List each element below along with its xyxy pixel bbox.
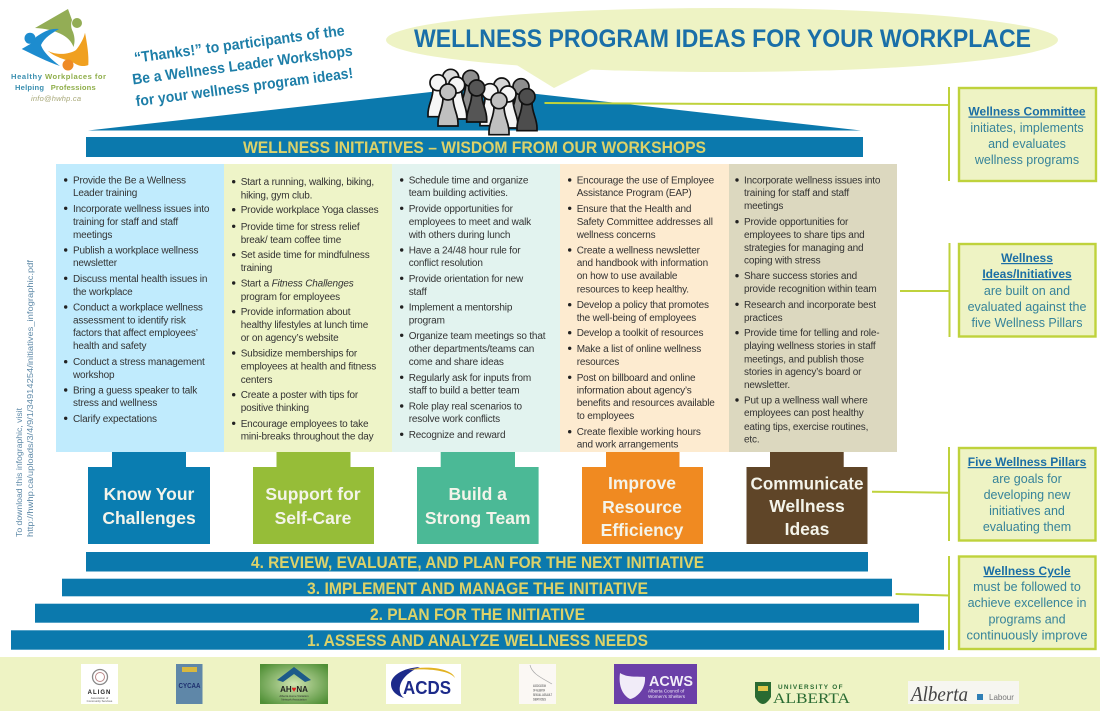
panel: Support for Self-Care initiatives: training <box>241 263 272 274</box>
panel: Build a Strong Team initiatives: Provide opportunities for <box>409 204 514 215</box>
panel: Communicate Wellness Ideas initiatives: employees to share tips and <box>744 230 864 241</box>
panel: Support for Self-Care initiatives: Start a Fitness Challenges <box>241 278 354 290</box>
panel: Support for Self-Care initiatives: mini-breaks throughout the day <box>241 432 374 442</box>
logo: Alberta Labour <box>908 681 1019 706</box>
callout: Wellness Committee: Wellness Committee <box>968 104 1086 118</box>
callout: Wellness Committee: and evaluates <box>988 137 1066 151</box>
logo: Alberta Labour: Labour <box>989 693 1014 702</box>
callout: Wellness Committee: initiates, implements <box>970 121 1084 135</box>
download note: To download this infographic, visit <box>14 407 24 537</box>
cycle step 4 <box>86 552 868 572</box>
panel: Improve Resource Efficiency initiatives: Post on billboard and online <box>577 373 696 384</box>
panel: Communicate Wellness Ideas initiatives: Provide time for telling and role- <box>744 328 879 339</box>
panel: Know Your Challenges initiatives: the workplace <box>73 287 133 298</box>
callout: Wellness Ideas/Initiatives: Wellness <box>1001 251 1053 265</box>
logo: AHNA: AH♥NA <box>280 685 308 694</box>
cycle step 2: 2. PLAN FOR THE INITIATIVE <box>370 606 585 624</box>
pillar: Improve Resource Efficiency: Improve <box>608 473 676 493</box>
panel: Communicate Wellness Ideas initiatives: Put up a wellness wall where <box>744 396 868 406</box>
callout: Wellness Cycle: achieve excellence in <box>968 596 1086 610</box>
callout: Wellness Ideas/Initiatives: are built on and <box>984 284 1070 298</box>
roof triangle <box>88 87 861 130</box>
pillar: Support for Self-Care: Support for <box>265 484 361 504</box>
cycle step 3: 3. IMPLEMENT AND MANAGE THE INITIATIVE <box>307 580 648 598</box>
panel: Communicate Wellness Ideas initiatives: newsletter. <box>744 380 790 391</box>
callout: Five Wellness Pillars <box>959 448 1096 540</box>
panel: Support for Self-Care initiatives: hiking, gym club. <box>241 190 312 202</box>
logo: Healthy Workplaces for Helping Professions: Helping <box>15 83 44 92</box>
pillar: Communicate Wellness Ideas: Ideas <box>785 519 830 539</box>
panel: Support for Self-Care initiatives: or on agency’s website <box>241 333 339 344</box>
panel: Improve Resource Efficiency initiatives: Assistance Program (EAP) <box>577 188 692 199</box>
cycle step 3 <box>62 579 892 598</box>
panel: Build a Strong Team initiatives: staff to build a better team <box>409 386 519 396</box>
panel: Build a Strong Team initiatives: staff <box>409 287 427 298</box>
panel: Build a Strong Team initiatives: program <box>409 316 445 326</box>
logo: ACWS: Alberta Council of <box>648 688 685 694</box>
panel: Communicate Wellness Ideas initiatives: Incorporate wellness issues into <box>744 176 881 186</box>
panel: Know Your Challenges initiatives: Conduct a workplace wellness <box>73 302 203 314</box>
logo: AHNA <box>260 664 328 704</box>
panel: Communicate Wellness Ideas initiatives: strategies for managing and <box>744 243 863 254</box>
connector: committee <box>544 87 949 181</box>
callout: Wellness Committee: wellness programs <box>974 153 1079 167</box>
thank-you note <box>131 22 354 110</box>
logo: Healthy Workplaces for Helping Professions <box>11 9 106 103</box>
panel: Know Your Challenges initiatives: Leader training <box>73 188 137 199</box>
panel: Communicate Wellness Ideas initiatives: Research and incorporate best <box>744 300 876 311</box>
panel: Improve Resource Efficiency initiatives: the well-being of employees <box>577 313 696 324</box>
panel: Support for Self-Care initiatives: Subsidize memberships for <box>241 348 358 360</box>
panel: Communicate Wellness Ideas initiatives <box>729 164 897 452</box>
panel: Communicate Wellness Ideas initiatives: meetings, and publish those <box>744 354 865 366</box>
panel: Build a Strong Team initiatives: Have a 24/48 hour rule for <box>409 246 521 256</box>
panel: Communicate Wellness Ideas initiatives: training for staff and staff <box>744 188 849 199</box>
panel: Support for Self-Care initiatives: Start a running, walking, biking, <box>241 177 374 188</box>
panel: Improve Resource Efficiency initiatives <box>560 164 729 452</box>
panel: Improve Resource Efficiency initiatives: benefits and resources available <box>577 398 715 409</box>
panel: Build a Strong Team initiatives: resolve work conflicts <box>409 414 500 425</box>
panel: Build a Strong Team initiatives: other departments/teams can <box>409 344 534 355</box>
panel: Support for Self-Care initiatives: Provide time for stress relief <box>241 222 360 233</box>
callout: Wellness Cycle <box>959 556 1096 649</box>
panel: Know Your Challenges initiatives: Conduct a stress management <box>73 357 205 368</box>
panel: Build a Strong Team initiatives: conflict resolution <box>409 258 483 269</box>
panel: Support for Self-Care initiatives: Create a poster with tips for <box>241 390 359 401</box>
pillar: Communicate Wellness Ideas: Communicate <box>750 474 864 494</box>
logo: AHNA: Network Association <box>281 698 307 702</box>
panel: Build a Strong Team initiatives <box>392 164 560 452</box>
callout: Wellness Cycle: programs and <box>988 612 1066 626</box>
panel: Know Your Challenges initiatives: Bring a guess speaker to talk <box>73 386 198 396</box>
panel: Improve Resource Efficiency initiatives: resources <box>577 357 619 368</box>
pillar: Communicate Wellness Ideas <box>746 452 868 544</box>
pillar: Build a Strong Team: Build a <box>449 484 507 504</box>
cycle step 1: 1. ASSESS AND ANALYZE WELLNESS NEEDS <box>307 632 648 650</box>
logo: CYCAA: CYCAA <box>178 681 201 690</box>
panel: Support for Self-Care initiatives <box>224 164 392 452</box>
callout: Wellness Committee <box>959 88 1096 181</box>
title speech bubble <box>386 8 1058 88</box>
logo: ACWS: Women's Shelters <box>648 694 686 699</box>
panel: Build a Strong Team initiatives: team building activities. <box>409 188 508 199</box>
logo: University of Alberta <box>755 682 850 707</box>
callout: Wellness Ideas/Initiatives: evaluated against the <box>968 300 1086 314</box>
panel: Know Your Challenges initiatives: Clarify expectations <box>73 414 157 425</box>
logo: CYCAA <box>176 664 202 704</box>
panel: Build a Strong Team initiatives: Role play real scenarios to <box>409 402 523 412</box>
panel: Support for Self-Care initiatives: break/ team coffee time <box>241 235 342 246</box>
panel: Know Your Challenges initiatives: factors that affect employees’ <box>73 328 198 339</box>
panel: Communicate Wellness Ideas initiatives: playing wellness stories in staff <box>744 341 876 352</box>
panel: Build a Strong Team initiatives: Recognize and reward <box>409 430 505 441</box>
pillar: Build a Strong Team <box>417 452 539 544</box>
callout: Five Wellness Pillars: are goals for <box>992 472 1062 486</box>
logo: ALIGN: ALIGN <box>88 690 111 696</box>
logo: Association of Alberta Sexual Assault Services: SERVICES <box>533 696 546 702</box>
panel: Know Your Challenges initiatives: Provide the Be a Wellness <box>73 176 186 186</box>
panel: Support for Self-Care initiatives: program for employees <box>241 292 340 303</box>
cycle step 2 <box>35 604 919 624</box>
thank-you note: for your wellness program ideas! <box>135 65 354 110</box>
panel: Communicate Wellness Ideas initiatives: practices <box>744 313 783 324</box>
title speech bubble: WELLNESS PROGRAM IDEAS FOR YOUR WORKPLACE <box>414 25 1031 53</box>
logo: University of Alberta: UNIVERSITY OF <box>778 684 844 691</box>
panel: Communicate Wellness Ideas initiatives: coping with stress <box>744 256 821 266</box>
callout: Wellness Cycle: Wellness Cycle <box>983 564 1071 578</box>
panel: Improve Resource Efficiency initiatives: wellness concerns <box>576 230 656 241</box>
logo: ACWS <box>614 664 697 704</box>
callout: Five Wellness Pillars: evaluating them <box>983 520 1071 534</box>
panel: Know Your Challenges initiatives: stress and wellness <box>73 398 157 409</box>
logo: ACDS: ACDS <box>403 678 451 698</box>
panel: Support for Self-Care initiatives: positive thinking <box>241 403 309 414</box>
panel: Know Your Challenges initiatives: health and safety <box>73 341 146 352</box>
logo: Association of Alberta Sexual Assault Services: ASSOCIATION <box>533 683 546 688</box>
pillar: Build a Strong Team: Strong Team <box>425 508 531 528</box>
logo: ALIGN <box>81 664 118 704</box>
logo: ALIGN: Community Services <box>87 699 113 703</box>
thank-you note: “Thanks!” to participants of the <box>133 22 346 67</box>
panel: Support for Self-Care initiatives: Encourage employees to take <box>241 419 369 430</box>
callout: Wellness Ideas/Initiatives: Ideas/Initiatives <box>982 267 1072 281</box>
panel: Communicate Wellness Ideas initiatives: meetings <box>744 201 783 212</box>
panel: Build a Strong Team initiatives: Regularly ask for inputs from <box>409 373 531 384</box>
panel: Support for Self-Care initiatives: Set aside time for mindfulness <box>241 250 370 261</box>
panel: Know Your Challenges initiatives: workshop <box>72 370 115 381</box>
callout: Five Wellness Pillars: developing new <box>984 488 1071 502</box>
panel: Support for Self-Care initiatives: Provide workplace Yoga classes <box>241 205 379 216</box>
panel: Improve Resource Efficiency initiatives: and handbook with information <box>577 258 708 269</box>
logo: Healthy Workplaces for Helping Professions: info@hwhp.ca <box>31 94 81 103</box>
logo: Alberta Labour: Alberta <box>909 682 968 706</box>
panel: Improve Resource Efficiency initiatives: Create a wellness newsletter <box>577 246 701 256</box>
pillar: Know Your Challenges <box>88 452 210 544</box>
icon: group of people <box>428 69 537 135</box>
logo: Healthy Workplaces for Helping Professions: Workplaces for <box>45 72 106 81</box>
logo: ACWS: ACWS <box>649 673 693 690</box>
panel: Support for Self-Care initiatives: healthy lifestyles at lunch time <box>241 320 369 331</box>
panel: Know Your Challenges initiatives <box>56 164 224 452</box>
panel: Build a Strong Team initiatives: Schedule time and organize <box>409 176 529 186</box>
panel: Know Your Challenges initiatives: meetings <box>73 230 112 241</box>
callout: Wellness Cycle: continuously improve <box>966 628 1088 642</box>
panel: Build a Strong Team initiatives: employees to meet and walk <box>409 217 532 228</box>
panel: Improve Resource Efficiency initiatives: Safety Committee addresses all <box>577 217 713 228</box>
panel: Know Your Challenges initiatives: assessment to identify risk <box>73 316 187 326</box>
panel: Improve Resource Efficiency initiatives: information about agency’s <box>577 386 692 396</box>
logo: Healthy Workplaces for Helping Professions: Healthy <box>11 72 43 81</box>
initiatives banner: WELLNESS INITIATIVES – WISDOM FROM OUR WORKSHOPS <box>243 139 706 157</box>
panel: Improve Resource Efficiency initiatives: Encourage the use of Employee <box>577 176 715 186</box>
panel: Improve Resource Efficiency initiatives: to employees <box>577 411 634 422</box>
panel: Improve Resource Efficiency initiatives: on how to use available <box>577 271 678 282</box>
panel: Improve Resource Efficiency initiatives: Ensure that the Health and <box>577 204 691 215</box>
pillar: Know Your Challenges: Know Your <box>104 484 195 504</box>
panel: Communicate Wellness Ideas initiatives: employees can post healthy <box>744 408 864 419</box>
panel: Improve Resource Efficiency initiatives: Develop a policy that promotes <box>577 300 709 311</box>
pillar: Improve Resource Efficiency: Resource <box>602 497 682 517</box>
download note <box>14 259 35 537</box>
download note: http://hwhp.ca/uploads/3/4/9/1/34914254/initiatives_infographic.pdf <box>25 259 35 537</box>
panel: Know Your Challenges initiatives: Publish a workplace wellness <box>73 246 198 256</box>
panel: Build a Strong Team initiatives: Provide orientation for new <box>409 274 524 285</box>
logo: Association of Alberta Sexual Assault Services: SEXUAL ASSAULT <box>533 692 552 697</box>
callout: Wellness Ideas/Initiatives: five Wellness Pillars <box>972 316 1082 330</box>
panel: Communicate Wellness Ideas initiatives: etc. <box>744 434 759 446</box>
panel: Know Your Challenges initiatives: training for staff and staff <box>73 217 178 228</box>
footer band <box>0 657 1100 711</box>
pillar: Support for Self-Care: Self-Care <box>275 508 352 528</box>
pillar: Know Your Challenges: Challenges <box>102 508 196 528</box>
logo: Association of Alberta Sexual Assault Services: OF ALBERTA <box>533 688 545 692</box>
logo: Association of Alberta Sexual Assault Services <box>519 664 556 704</box>
panel: Improve Resource Efficiency initiatives: resources to keep healthy. <box>577 284 689 296</box>
logo: AHNA: Alberta Home Visitation <box>279 694 309 698</box>
connector: ideas <box>900 243 950 337</box>
panel: Know Your Challenges initiatives: Discuss mental health issues in <box>73 274 207 285</box>
logo: ALIGN: Association of <box>91 696 108 700</box>
panel: Know Your Challenges initiatives: Incorporate wellness issues into <box>73 204 210 215</box>
logo: ACDS <box>386 664 461 704</box>
panel: Communicate Wellness Ideas initiatives: Share success stories and <box>744 271 857 282</box>
callout: Five Wellness Pillars: initiatives and <box>989 504 1065 518</box>
pillar: Improve Resource Efficiency: Efficiency <box>601 520 684 540</box>
panel: Communicate Wellness Ideas initiatives: stories in agency’s board or <box>744 367 862 378</box>
pillar: Communicate Wellness Ideas: Wellness <box>769 496 845 516</box>
callout: Wellness Ideas/Initiatives <box>959 244 1096 336</box>
connector: cycle <box>896 556 949 650</box>
panel: Know Your Challenges initiatives: newsletter <box>73 258 118 269</box>
panel: Communicate Wellness Ideas initiatives: Provide opportunities for <box>744 217 849 228</box>
panel: Communicate Wellness Ideas initiatives: eating tips, exercise routines, <box>744 422 868 433</box>
initiatives banner <box>86 137 863 157</box>
connector: pillars <box>872 447 949 541</box>
panel: Improve Resource Efficiency initiatives: Make a list of online wellness <box>577 344 701 355</box>
logo: University of Alberta: ALBERTA <box>773 691 850 707</box>
cycle step 4: 4. REVIEW, EVALUATE, AND PLAN FOR THE NEXT INITIATIVE <box>251 554 704 572</box>
callout: Five Wellness Pillars: Five Wellness Pillars <box>968 455 1087 469</box>
panel: Build a Strong Team initiatives: Implement a mentorship <box>409 302 513 314</box>
panel: Improve Resource Efficiency initiatives: and work arrangements <box>577 440 678 450</box>
panel: Support for Self-Care initiatives: Provide information about <box>241 307 351 318</box>
panel: Build a Strong Team initiatives: Organize team meetings so that <box>409 331 546 342</box>
panel: Communicate Wellness Ideas initiatives: provide recognition within team <box>744 284 877 295</box>
cycle step 1 <box>11 630 944 650</box>
thank-you note: Be a Wellness Leader Workshops <box>131 43 354 88</box>
logo: Healthy Workplaces for Helping Professions: Professions <box>51 83 96 92</box>
panel: Build a Strong Team initiatives: come and share ideas <box>409 357 504 368</box>
panel: Support for Self-Care initiatives: employees at health and fitness <box>241 362 376 372</box>
panel: Improve Resource Efficiency initiatives: Develop a toolkit of resources <box>577 328 704 339</box>
panel: Support for Self-Care initiatives: centers <box>241 375 272 386</box>
pillar: Improve Resource Efficiency <box>582 452 703 544</box>
callout: Wellness Cycle: must be followed to <box>973 580 1081 594</box>
panel: Build a Strong Team initiatives: with others during lunch <box>408 230 510 241</box>
panel: Improve Resource Efficiency initiatives: Create flexible working hours <box>577 427 701 438</box>
pillar: Support for Self-Care <box>253 452 374 544</box>
